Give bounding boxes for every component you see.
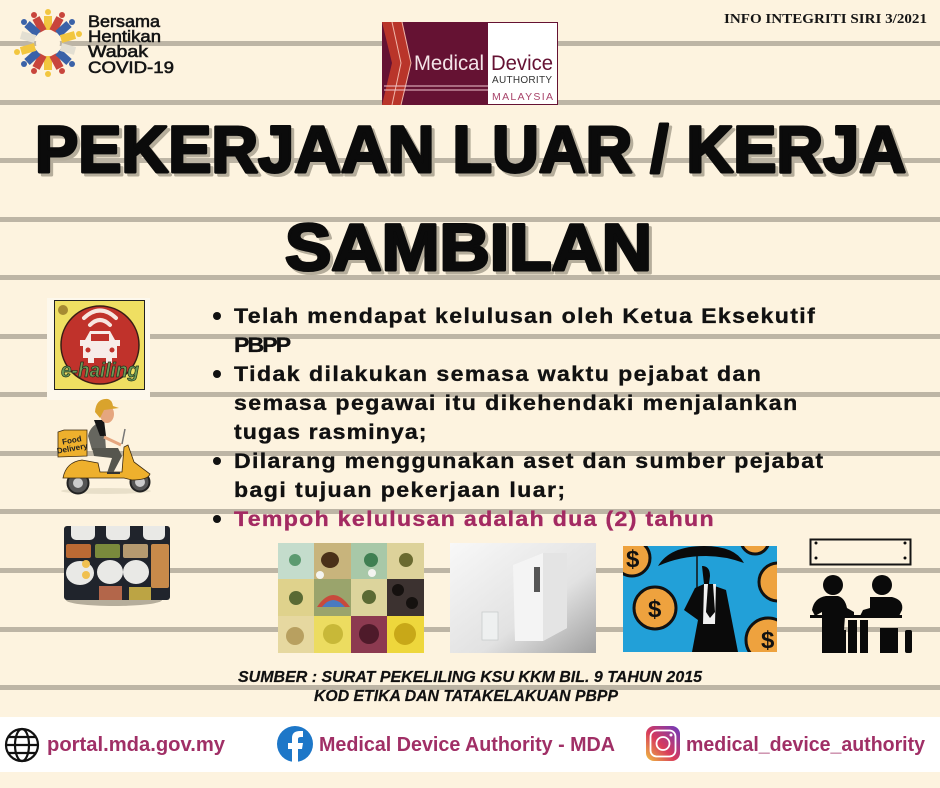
photo: businessman under umbrella with coins: $	[761, 627, 775, 654]
footer contact bar	[0, 717, 940, 772]
bullet list	[234, 304, 824, 531]
icon: food delivery scooter: Food	[61, 434, 82, 447]
bullet list: PBPP	[234, 333, 291, 357]
bullet list: semasa pegawai itu dikehendaki menjalankan	[234, 391, 797, 415]
icon: e-hailing badge	[47, 298, 150, 400]
bullet markers	[213, 312, 221, 523]
title: PEKERJAAN LUAR / KERJA	[38, 115, 909, 189]
photo: businessman under umbrella with coins: $	[626, 546, 640, 573]
logo wordmark	[88, 12, 174, 77]
logo wordmark: Wabak	[88, 42, 149, 61]
bullet 4: Tempoh kelulusan adalah dua (2) tahun	[234, 507, 714, 531]
icon: radial people emblem	[14, 9, 82, 77]
logo wordmark: Bersama	[88, 12, 161, 31]
icon: meeting pictogram with nameplate	[810, 540, 912, 653]
bullet 1: Telah mendapat kelulusan oleh Ketua Eksekutif	[234, 304, 815, 328]
title: SAMBILAN	[288, 213, 655, 287]
logo: Medical Device Authority Malaysia: Device	[491, 52, 553, 75]
logo wordmark: COVID-19	[88, 58, 174, 77]
photo: businessman under umbrella with coins	[623, 546, 777, 652]
logo: Medical Device Authority Malaysia	[382, 22, 558, 105]
logo: Medical Device Authority Malaysia: AUTHORITY	[492, 75, 552, 86]
info series label: INFO INTEGRITI SIRI 3/2021	[724, 11, 927, 26]
source note: KOD ETIKA DAN TATAKELAKUAN PBPP	[314, 688, 618, 705]
bullet list: bagi tujuan pekerjaan luar;	[234, 478, 565, 502]
logo: Medical Device Authority Malaysia: MALAYSIA	[492, 91, 553, 103]
title: PEKERJAAN LUAR / KERJA	[35, 112, 906, 186]
icon: food delivery scooter: Delivery	[56, 441, 89, 456]
icon: facebook	[277, 726, 313, 762]
photo: packed rice meals	[64, 520, 170, 606]
website: portal.mda.gov.my	[47, 734, 226, 756]
bullet 3: Dilarang menggunakan aset dan sumber pejabat	[234, 449, 824, 473]
photo: homemade cookies collage	[278, 543, 424, 653]
photo: water dispenser	[450, 543, 596, 653]
bullet list: tugas rasminya;	[234, 420, 427, 444]
icon: food delivery scooter	[55, 399, 151, 494]
icon: instagram	[646, 726, 680, 761]
logo: Medical Device Authority Malaysia: Medical	[414, 52, 484, 75]
photo: businessman under umbrella with coins: $	[648, 596, 662, 623]
logo: Bersama Hentikan Wabak COVID-19	[14, 9, 174, 77]
source note	[238, 669, 703, 705]
bullet 2: Tidak dilakukan semasa waktu pejabat dan	[234, 362, 761, 386]
source note: SUMBER : SURAT PEKELILING KSU KKM BIL. 9 TAHUN 2015	[238, 669, 703, 686]
title: SAMBILAN	[285, 210, 652, 284]
facebook name: Medical Device Authority - MDA	[319, 734, 615, 756]
icon: e-hailing badge: e-hailing	[61, 360, 139, 382]
logo wordmark: Hentikan	[88, 27, 161, 46]
instagram handle: medical_device_authority	[686, 734, 926, 756]
icon: globe	[6, 729, 38, 761]
title	[35, 112, 909, 287]
